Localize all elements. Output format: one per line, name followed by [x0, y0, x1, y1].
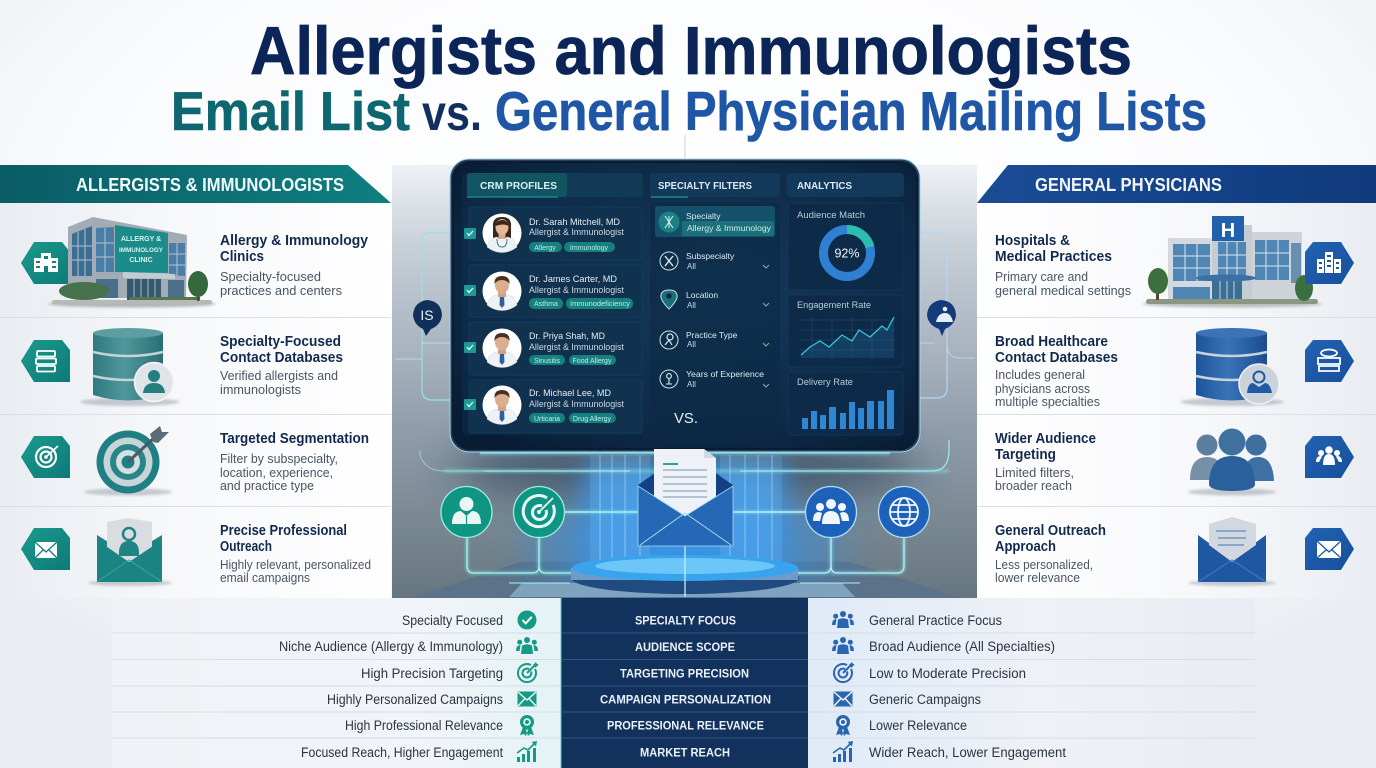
illustration: teal database with person badge: [80, 328, 180, 406]
text: databases: Specialty-Focused: [220, 334, 341, 350]
text: general outreach: [995, 523, 1106, 585]
text: broad databases: physicians across: [995, 382, 1090, 396]
text: clinics: practices and centers: [220, 284, 342, 298]
row: audience scope: AUDIENCE SCOPE: [635, 640, 735, 654]
analytics tab: [787, 173, 904, 197]
icon: email badge: [21, 528, 70, 570]
text: databases: [220, 334, 343, 397]
text: wider audience: broader reach: [995, 479, 1072, 493]
row: specialty focus: Specialty Focused: [402, 613, 503, 628]
text: broad databases: [995, 334, 1118, 409]
row: market reach: MARKET REACH: [640, 746, 730, 760]
text: outreach: Precise Professional: [220, 523, 347, 539]
analytics tab: ANALYTICS: [797, 181, 852, 192]
panel: CRM profiles: [462, 173, 643, 435]
text: segmentation: location, experience,: [220, 466, 333, 480]
text: clinics: Allergy & Immunology: [220, 233, 368, 249]
row: campaign personalization: [327, 692, 981, 707]
icon: database badge: [21, 340, 70, 382]
panel header: general physicians: [977, 165, 1376, 203]
row: targeting precision: Low to Moderate Precision: [869, 666, 1026, 681]
chart: engagement rate line: [788, 295, 903, 367]
clinic sign: ALLERGY &: [121, 236, 161, 243]
CRM dashboard screen: [450, 159, 920, 452]
icon: email badge blue: [1305, 528, 1354, 570]
panel header: general physicians: GENERAL PHYSICIANS: [1035, 175, 1222, 195]
text: databases: Verified allergists and: [220, 369, 338, 383]
text: broad databases: multiple specialties: [995, 395, 1100, 409]
text: wider audience: [995, 431, 1096, 493]
profile: Dr. James Carter: [464, 265, 642, 317]
chart: delivery rate bars: Delivery Rate: [797, 377, 853, 387]
icon: left hub node: [413, 300, 442, 336]
profile: Dr. Michael Lee: [464, 380, 642, 433]
row: audience scope: [279, 637, 1055, 654]
row: professional relevance: [345, 715, 967, 736]
row: targeting precision: [361, 662, 1026, 682]
chart: delivery rate bars: [788, 372, 903, 435]
profile: Dr. Priya Shah: Sinusitis: [534, 358, 561, 365]
VS label: VS.: [674, 410, 698, 427]
filter: practice type: [660, 330, 769, 349]
row: specialty-focused contact databases: [21, 328, 343, 406]
row: specialty focus: [402, 610, 1002, 630]
clinic sign: CLINIC: [129, 257, 153, 264]
row: market reach: Wider Reach, Lower Engagement: [869, 745, 1066, 760]
illustration: specialty clinic building: [48, 217, 216, 308]
icon: target node: [514, 486, 564, 538]
profile: Dr. Michael Lee: Dr. Michael Lee, MD: [529, 388, 611, 399]
row: specialty focus: General Practice Focus: [869, 613, 1002, 628]
filter: years of experience: All: [687, 380, 696, 389]
text: hospitals: Medical Practices: [995, 249, 1112, 265]
profile: Dr. James Carter: Asthma: [534, 301, 558, 308]
text: segmentation: and practice type: [220, 479, 314, 493]
profile: Dr. Priya Shah: Allergist & Immunologist: [529, 342, 624, 352]
chart: audience match donut: [788, 203, 903, 290]
text: segmentation: [220, 431, 369, 493]
icon: audience badge: [1305, 436, 1354, 478]
filter: specialty: Allergy & Immunology: [687, 223, 772, 233]
row: professional relevance: Lower Relevance: [869, 718, 967, 733]
filter: location: Location: [686, 290, 718, 300]
row: market reach: [301, 741, 1066, 762]
title: vs.: [422, 85, 482, 141]
illustration: target with arrow: [84, 426, 172, 496]
profile: Dr. Sarah Mitchell: Immunology: [570, 245, 609, 252]
panel: allergists and immunologists: [0, 165, 391, 598]
row: general outreach approach: [995, 517, 1354, 586]
text: wider audience: Wider Audience: [995, 431, 1096, 447]
circuit lines: [395, 233, 975, 583]
icon: clinic badge: [21, 242, 70, 284]
title: [171, 13, 1207, 142]
chart: engagement rate line: Engagement Rate: [797, 300, 871, 310]
text: clinics: [220, 233, 368, 298]
filters tab: SPECIALTY FILTERS: [658, 181, 752, 192]
filter: specialty: [655, 206, 775, 237]
profile: Dr. James Carter: Dr. James Carter, MD: [529, 274, 617, 285]
filter: specialty: Specialty: [686, 211, 721, 221]
panel header: allergists: [0, 165, 391, 203]
text: segmentation: Targeted Segmentation: [220, 431, 369, 447]
profile: Dr. Michael Lee: Allergist & Immunologist: [529, 399, 624, 409]
text: broad databases: Includes general: [995, 368, 1085, 382]
title: General Physician Mailing Lists: [495, 80, 1207, 142]
row: campaign personalization: Highly Personalized Campaigns: [327, 692, 503, 707]
chart: audience match donut: 92%: [834, 246, 860, 260]
text: outreach: email campaigns: [220, 571, 310, 585]
profile: Dr. Michael Lee: Urticaria: [534, 416, 560, 423]
text: wider audience: Limited filters,: [995, 466, 1074, 480]
filter: practice type: Practice Type: [686, 330, 738, 340]
icon: target badge: [21, 436, 70, 478]
row: targeting precision: High Precision Targeting: [361, 666, 503, 681]
icon: left hub node: IS: [420, 307, 434, 323]
filter: years of experience: [660, 369, 769, 389]
row: wider audience targeting: [995, 428, 1354, 496]
text: outreach: Outreach: [220, 539, 272, 555]
row: targeted segmentation: [21, 426, 369, 496]
central illustration backdrop: [392, 135, 977, 598]
row: specialty focus: SPECIALTY FOCUS: [635, 614, 736, 628]
filter: location: [661, 290, 769, 310]
row: audience scope: Broad Audience (All Specialties): [869, 639, 1055, 654]
panel: analytics: [787, 173, 904, 435]
text: outreach: [220, 523, 371, 585]
profile: Dr. James Carter: Immunodeficiency: [570, 301, 631, 308]
illustration: teal envelope with profile letter: [88, 518, 172, 586]
profile: Dr. Priya Shah: Food Allergy: [573, 358, 612, 365]
hospital H sign: H: [1221, 220, 1235, 242]
profile: Dr. Sarah Mitchell: [464, 207, 642, 260]
text: databases: immunologists: [220, 383, 301, 397]
row: professional relevance: High Professional Relevance: [345, 718, 503, 733]
text: hospitals: general medical settings: [995, 284, 1131, 298]
profile: Dr. Priya Shah: Dr. Priya Shah, MD: [529, 331, 605, 342]
filter: location: All: [687, 301, 696, 310]
clinic sign: IMMUNOLOGY: [119, 247, 164, 254]
illustration: hospital building: [1142, 216, 1322, 308]
panel header: allergists: ALLERGISTS & IMMUNOLOGISTS: [76, 175, 344, 195]
CRM tab: CRM PROFILES: [480, 181, 557, 192]
comparison table: [112, 598, 1255, 768]
filter: years of experience: Years of Experience: [686, 369, 764, 379]
icon: audience node: [806, 486, 856, 538]
row: campaign personalization: Generic Campaigns: [869, 692, 981, 707]
row: precise professional outreach: [21, 518, 371, 586]
panel: general physicians: [977, 165, 1376, 598]
text: clinics: Specialty-focused: [220, 270, 321, 284]
text: wider audience: Targeting: [995, 447, 1056, 463]
text: segmentation: Filter by subspecialty,: [220, 452, 338, 466]
chart: audience match donut: Audience Match: [797, 210, 865, 220]
profile: Dr. Michael Lee: Drug Allergy: [573, 416, 612, 423]
text: broad databases: Broad Healthcare: [995, 334, 1108, 350]
illustration: blue database with person badge: [1180, 328, 1284, 406]
text: general outreach: lower relevance: [995, 571, 1080, 585]
filter: subspecialty: [660, 251, 769, 271]
profile: Dr. Sarah Mitchell: Dr. Sarah Mitchell, MD: [529, 217, 620, 228]
platform: [571, 452, 799, 597]
CRM tab: [467, 173, 643, 197]
icon: central envelope with letter: [638, 449, 733, 546]
row: allergy and immunology clinics: [21, 217, 368, 308]
text: clinics: Clinics: [220, 249, 264, 265]
profile: Dr. Sarah Mitchell: Allergy: [534, 245, 556, 252]
text: hospitals: Hospitals &: [995, 233, 1070, 249]
profile: Dr. Sarah Mitchell: Allergist & Immunologist: [529, 227, 624, 237]
text: general outreach: General Outreach: [995, 523, 1106, 539]
text: hospitals: Primary care and: [995, 270, 1088, 284]
glowing light columns: [590, 455, 782, 570]
row: campaign personalization: CAMPAIGN PERSONALIZATION: [600, 692, 771, 706]
illustration: blue envelope with letter: [1188, 517, 1276, 586]
row: professional relevance: PROFESSIONAL RELEVANCE: [607, 718, 764, 732]
title: Email List: [171, 80, 410, 142]
filters tab: [650, 173, 780, 197]
icon: doctor node: [441, 486, 492, 538]
text: hospitals: [995, 233, 1131, 298]
row: market reach: Focused Reach, Higher Engagement: [301, 745, 503, 760]
hospital H sign: [1212, 216, 1244, 242]
row: hospitals and medical practices: [995, 216, 1354, 308]
row: targeting precision: TARGETING PRECISION: [620, 666, 749, 680]
text: databases: Contact Databases: [220, 350, 343, 366]
text: outreach: Highly relevant, personalized: [220, 558, 371, 572]
icon: hospital badge: [1305, 242, 1354, 284]
text: general outreach: Approach: [995, 539, 1056, 555]
clinic sign: [119, 236, 164, 264]
row: audience scope: Niche Audience (Allergy & Immunology): [279, 639, 503, 654]
filter: subspecialty: All: [687, 262, 696, 271]
text: broad databases: Contact Databases: [995, 350, 1118, 366]
filter: practice type: All: [687, 340, 696, 349]
row: broad healthcare contact databases: [995, 328, 1354, 409]
illustration: three people: [1188, 428, 1276, 496]
profile: Dr. James Carter: Allergist & Immunologist: [529, 285, 624, 295]
text: general outreach: Less personalized,: [995, 558, 1093, 572]
filter: subspecialty: Subspecialty: [686, 251, 735, 261]
profile: Dr. Priya Shah: [464, 322, 642, 375]
panel: specialty filters: [650, 173, 780, 435]
title: Allergists and Immunologists: [250, 13, 1132, 89]
icon: right hub node: [927, 300, 956, 336]
icon: database badge blue: [1305, 340, 1354, 382]
icon: globe node: [878, 486, 930, 538]
